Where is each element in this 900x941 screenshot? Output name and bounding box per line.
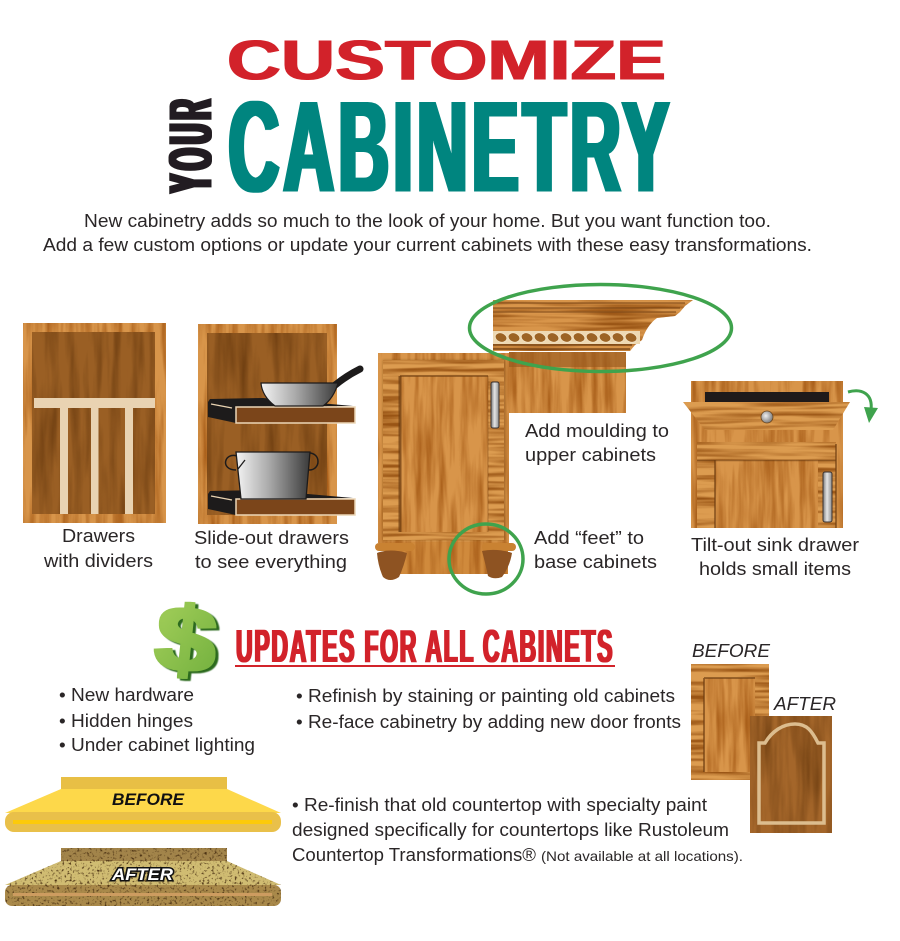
label: holds small items <box>699 559 851 579</box>
after label: AFTER <box>773 694 836 714</box>
heading: updates for all cabinets: UPDATES FOR ALL CABINETS <box>236 620 612 672</box>
label: base cabinets <box>534 552 657 572</box>
countertop text <box>292 795 743 865</box>
label: with dividers <box>43 551 153 571</box>
panel: tilt-out sink drawer <box>683 381 878 579</box>
heading: customize: CUSTOMIZE <box>227 28 666 92</box>
door frame <box>383 360 505 540</box>
countertop before <box>5 777 281 832</box>
bullet list: hardware: • New hardware <box>59 685 194 705</box>
divider bars <box>34 398 155 514</box>
before and after doors <box>691 641 836 833</box>
countertop after <box>5 848 281 906</box>
before label: BEFORE <box>692 641 771 661</box>
panel: drawers with dividers <box>23 323 166 571</box>
countertop text: designed specifically for countertops like Rustoleum <box>292 820 729 840</box>
before door <box>691 664 769 780</box>
intro text <box>43 211 812 255</box>
after door <box>750 716 832 833</box>
bullet list: refinish: • Refinish by staining or painting old cabinets <box>296 686 675 706</box>
label: to see everything <box>195 552 347 572</box>
callout: feet circle <box>449 524 523 594</box>
label <box>43 526 153 571</box>
countertop text: Countertop Transformations® <box>292 845 536 865</box>
tilted drawer front <box>683 402 850 430</box>
label: Drawers <box>62 526 135 546</box>
bottom drawer <box>208 490 355 515</box>
label <box>534 528 657 572</box>
handle <box>491 382 499 428</box>
feet <box>375 543 516 580</box>
label <box>194 528 349 572</box>
heading: your: YOUR <box>158 99 226 193</box>
crown moulding <box>493 300 693 351</box>
panel: slide-out drawers <box>194 324 360 572</box>
title <box>158 28 669 220</box>
bullet list: refinish: • Re-face cabinetry by adding new door fronts <box>296 712 681 732</box>
knob <box>761 411 773 423</box>
callout: moulding ellipse <box>470 284 732 372</box>
label <box>525 421 669 465</box>
pot <box>226 452 318 499</box>
label: Tilt-out sink drawer <box>691 535 859 555</box>
rope ovals <box>494 331 638 344</box>
countertop after: AFTER <box>111 866 173 884</box>
handle <box>823 472 832 522</box>
label: Add moulding to <box>525 421 669 441</box>
bullet list: refinish <box>296 686 681 732</box>
toe kick <box>385 542 508 574</box>
upper cabinet <box>509 352 626 413</box>
intro text: New cabinetry adds so much to the look of your home. But you want function too. <box>84 211 771 231</box>
drawer slot <box>705 392 829 402</box>
label: upper cabinets <box>525 445 656 465</box>
top drawer <box>208 398 355 423</box>
countertop text: • Re-finish that old countertop with specialty paint <box>292 795 707 815</box>
cabinet body <box>378 353 509 543</box>
bullet list: hardware: • Under cabinet lighting <box>59 735 255 755</box>
panel: moulding on upper cabinet <box>493 300 693 465</box>
icon: dollar sign: $ <box>151 586 221 694</box>
countertop text: (Not available at all locations). <box>541 848 743 864</box>
bullet list: hardware <box>59 685 255 755</box>
arrow <box>848 391 878 423</box>
countertop before: BEFORE <box>112 791 185 809</box>
heading: cabinetry: CABINETRY <box>228 75 669 220</box>
label <box>691 535 859 579</box>
lower door <box>697 442 836 528</box>
panel: base cabinet with feet <box>375 353 657 580</box>
intro text: Add a few custom options or update your current cabinets with these easy transformations. <box>43 235 812 255</box>
bullet list: hardware: • Hidden hinges <box>59 711 193 731</box>
label: Add “feet” to <box>534 528 644 548</box>
label: Slide-out drawers <box>194 528 349 548</box>
pan <box>261 369 360 406</box>
